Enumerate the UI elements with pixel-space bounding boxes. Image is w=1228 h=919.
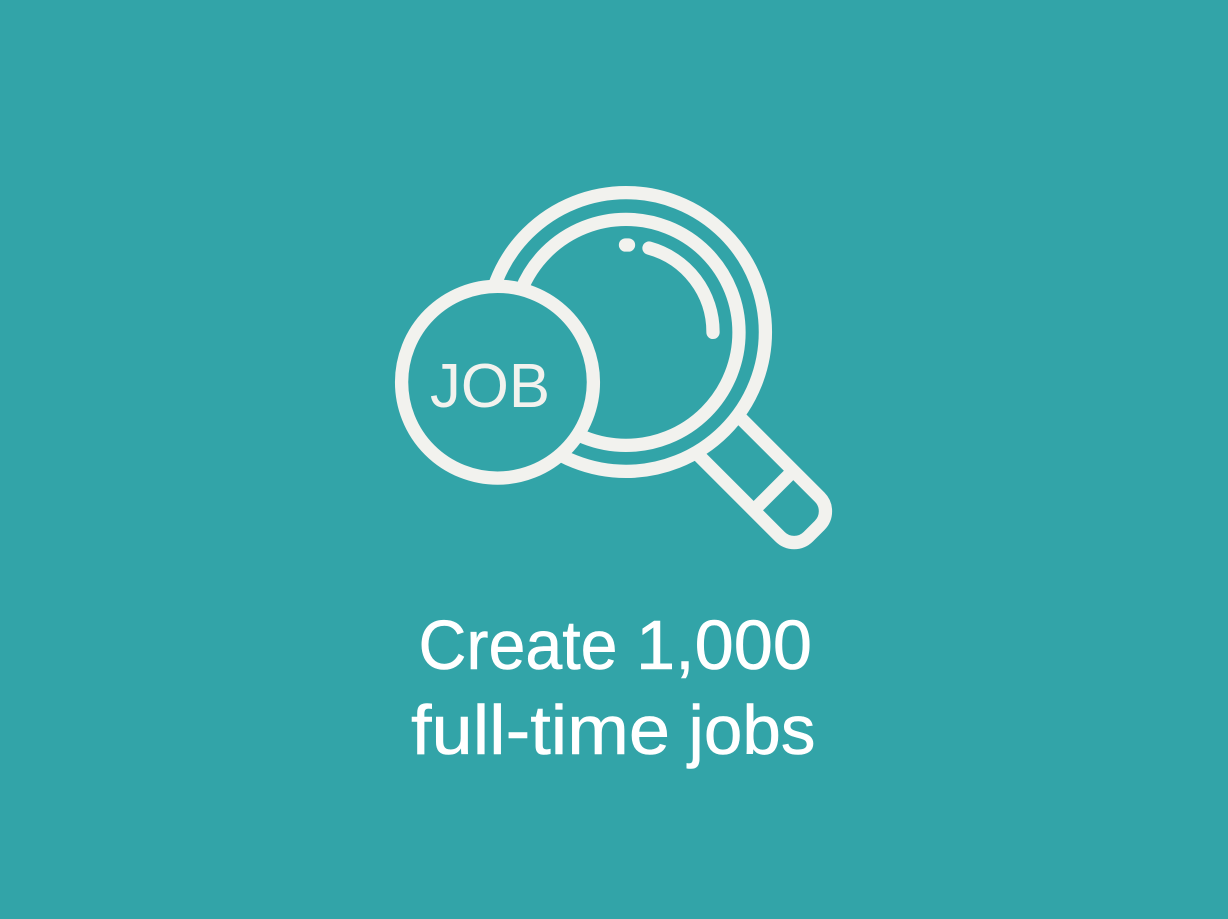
caption line 2 end: jobs — [687, 691, 816, 769]
job label: JOB — [430, 352, 550, 421]
inner lens ring — [513, 219, 739, 445]
caption line 1 number: 1,000 — [636, 606, 812, 684]
highlight dot — [626, 238, 628, 252]
caption line 1: Create — [418, 606, 618, 684]
handle band — [754, 471, 793, 510]
icon: magnifying glass with job label — [402, 193, 825, 543]
lens highlight — [649, 248, 713, 332]
outer lens ring — [487, 193, 765, 471]
small job circle — [402, 286, 593, 478]
caption — [411, 606, 816, 769]
caption line 2: full-time — [411, 691, 670, 769]
handle — [695, 416, 825, 543]
